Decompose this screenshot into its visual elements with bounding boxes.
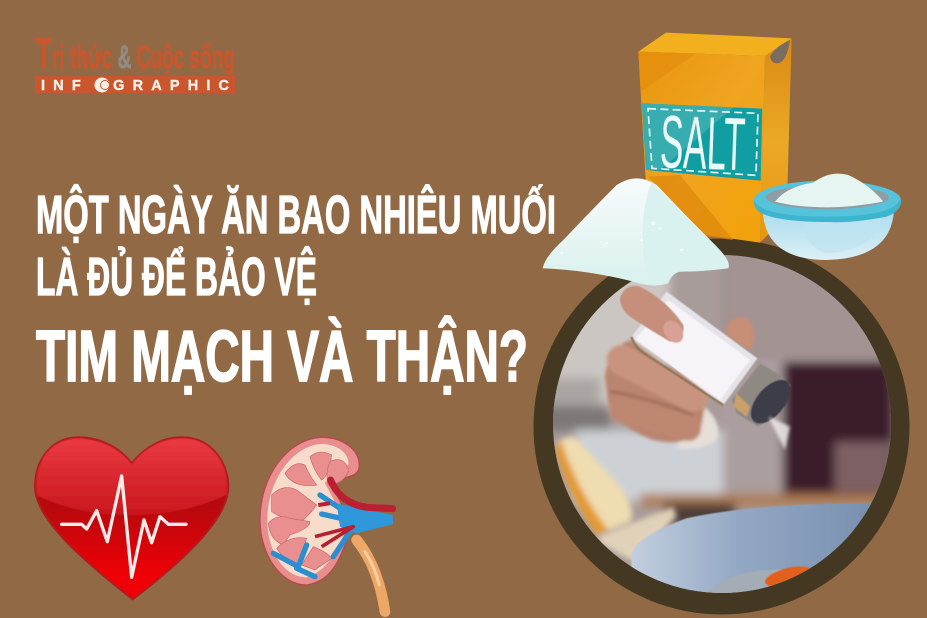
vein	[273, 495, 353, 577]
salt shaker	[632, 292, 798, 431]
salt stream	[768, 417, 790, 450]
shaker cap	[732, 363, 791, 427]
box front	[638, 52, 765, 243]
white dish	[598, 507, 677, 562]
bread slice	[555, 437, 677, 562]
kidney outer	[260, 437, 359, 585]
salt box: SALT	[659, 99, 747, 186]
salt in bowl	[775, 174, 883, 207]
logo globe icon	[94, 78, 110, 92]
egg	[708, 566, 810, 593]
ureter	[357, 540, 385, 612]
kidney inner	[267, 444, 348, 577]
artery	[331, 480, 393, 509]
logo bar	[35, 76, 235, 93]
logo infographic label: INF GRAPHIC	[41, 78, 230, 94]
photo: hand shaking salt over a pan	[540, 250, 900, 597]
box spout	[770, 40, 790, 63]
salt bowl	[754, 174, 901, 260]
salt box	[638, 33, 792, 243]
box top	[638, 33, 792, 56]
logo wordmark: Tri thức & Cuộc sống	[36, 29, 235, 78]
photo circle frame	[534, 238, 910, 614]
title line 1: MỘT NGÀY ĂN BAO NHIÊU MUỐI	[36, 184, 556, 245]
salt pile	[543, 178, 729, 285]
box side	[760, 38, 792, 243]
salt label	[642, 103, 762, 181]
kidney lobes	[268, 452, 349, 570]
icon: heart with pulse	[35, 437, 228, 599]
title line 3: TIM MẠCH VÀ THẬN?	[36, 316, 528, 397]
bowl body	[763, 210, 894, 260]
blurred room background	[558, 275, 674, 412]
index finger with nail	[620, 286, 687, 346]
icon: kidney	[260, 437, 393, 612]
title line 2: LÀ ĐỦ ĐỂ BẢO VỆ	[36, 246, 317, 307]
pulse line	[62, 476, 186, 577]
blue pan	[630, 503, 873, 597]
hand palm and fingers	[605, 317, 755, 449]
bowl rim	[754, 181, 901, 219]
title	[36, 184, 556, 397]
salt grains	[561, 222, 683, 254]
logo	[35, 29, 235, 94]
